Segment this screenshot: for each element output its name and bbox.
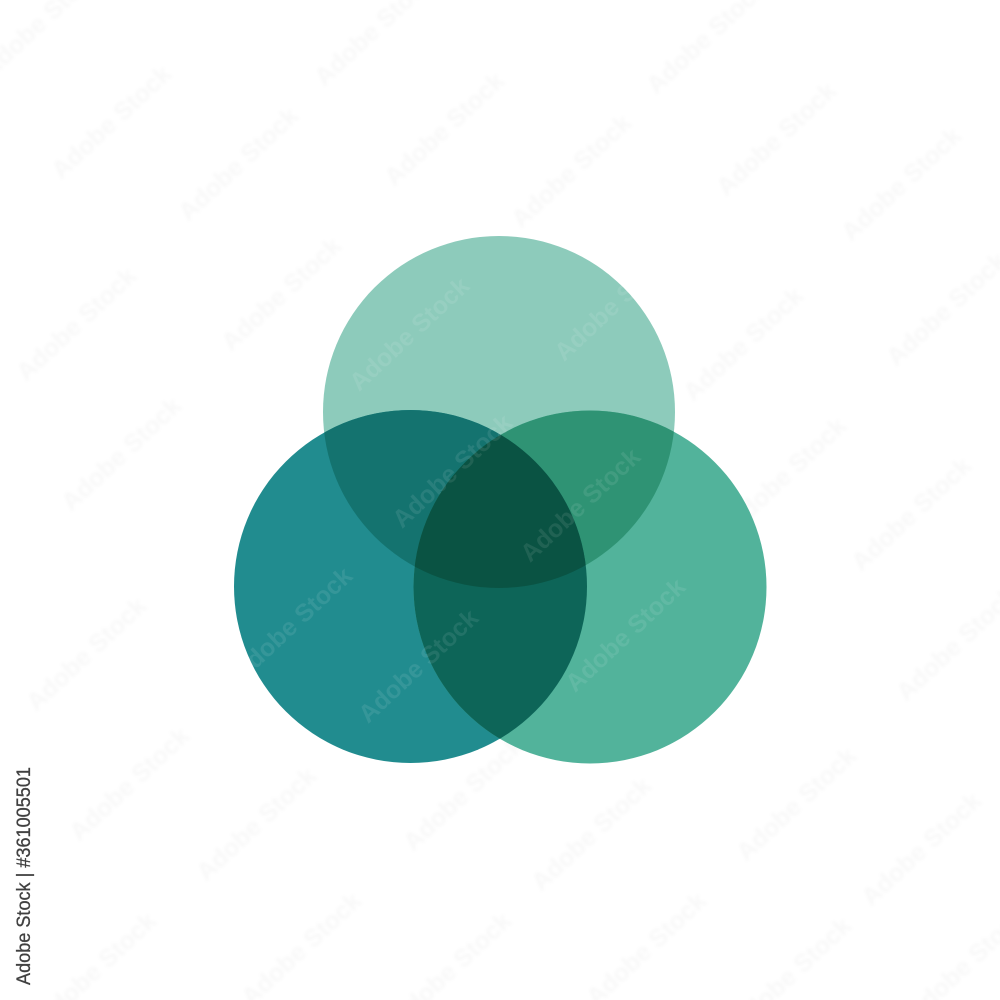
watermark shadow on white background: Adobe Stock	[721, 412, 852, 536]
circle: left	[234, 410, 587, 763]
watermark shadow on white background: Adobe Stock	[398, 732, 529, 856]
watermark shadow on white background: Adobe Stock	[526, 772, 657, 896]
overlap: centre of all three	[414, 435, 586, 588]
infographic canvas	[16, 236, 766, 986]
watermark over circles: Adobe Stock	[353, 604, 484, 728]
overlap: top and right	[500, 410, 674, 565]
watermark shadow on white background: Adobe Stock	[64, 722, 195, 846]
stock image id label: Adobe Stock | #361005501	[14, 767, 35, 985]
watermark over circles: Adobe Stock	[387, 409, 518, 533]
watermark shadow on white background: Adobe Stock	[678, 282, 809, 406]
watermark over circles	[227, 242, 691, 728]
watermark shadow on white background: Adobe Stock	[731, 742, 862, 866]
watermark over circles: Adobe Stock	[549, 242, 680, 366]
watermark shadow on white background: Adobe Stock	[836, 122, 967, 246]
overlap: left and right	[414, 435, 587, 739]
watermark over circles: Adobe Stock	[515, 443, 646, 567]
watermark shadow on white background: Adobe Stock	[56, 392, 187, 516]
overlap: top and left	[324, 410, 501, 566]
watermark shadow on white background: Adobe Stock	[216, 232, 347, 356]
watermark shadow on white background: Adobe Stock	[379, 67, 510, 191]
watermark shadow on white background: Adobe Stock	[11, 262, 142, 386]
circle: right	[414, 410, 766, 764]
watermark shadow on white background: Adobe Stock	[711, 77, 842, 201]
watermark shadow on white background: Adobe Stock	[856, 787, 987, 911]
watermark shadow on white background: Adobe Stock	[21, 592, 152, 716]
watermark shadow on white background: Adobe Stock	[173, 102, 304, 226]
watermark over circles: Adobe Stock	[560, 573, 691, 697]
watermark over circles: Adobe Stock	[227, 562, 358, 686]
watermark shadow on white background: Adobe Stock	[191, 762, 322, 886]
watermark shadow on white background: Adobe Stock	[46, 60, 177, 184]
circle: top	[323, 236, 675, 588]
watermark over circles: Adobe Stock	[344, 272, 475, 396]
watermark shadow on white background: Adobe Stock	[506, 109, 637, 233]
watermark shadow on white background: Adobe Stock	[846, 452, 977, 576]
venn diagram	[234, 236, 766, 764]
